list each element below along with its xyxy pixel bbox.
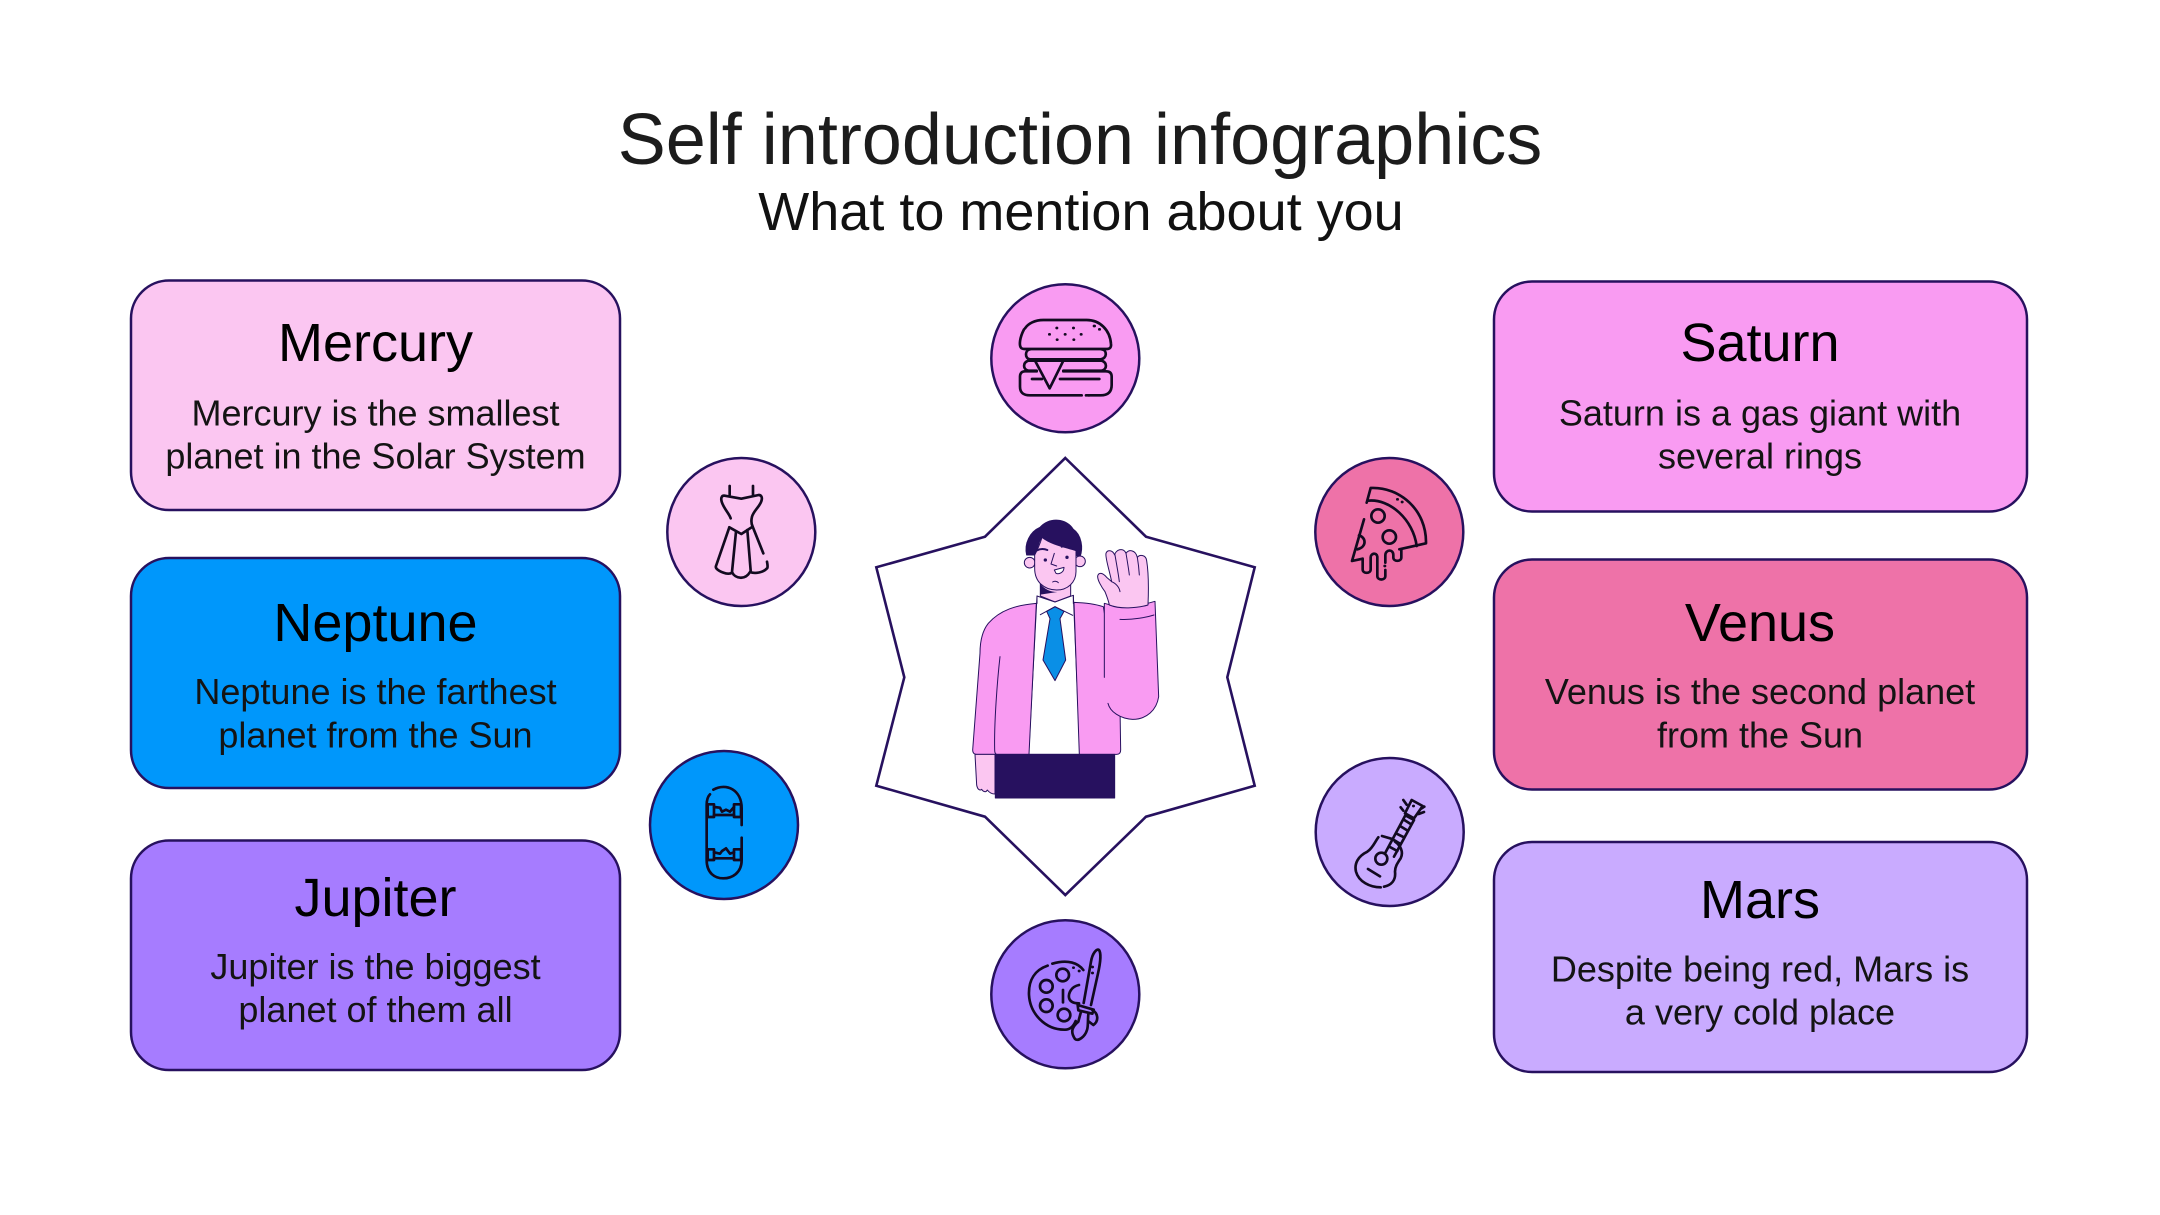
subtitle: What to mention about you <box>758 182 1404 242</box>
icon: pizza <box>1352 488 1426 579</box>
panel: Venus: Venus <box>1685 593 1835 653</box>
ears <box>1024 557 1035 568</box>
icon: dress <box>716 486 768 578</box>
eyes, nose, mouth <box>1037 546 1071 550</box>
raised arm <box>1104 601 1159 719</box>
panel: Venus: from the Sun <box>1657 714 1863 756</box>
panel: Jupiter: Jupiter is the biggest <box>210 946 541 987</box>
panel: Jupiter: Jupiter <box>294 868 457 928</box>
trousers <box>995 754 1115 798</box>
panel: Jupiter: planet of them all <box>238 989 513 1030</box>
shirt <box>1029 595 1080 755</box>
panel: Mars: Despite being red, Mars is <box>1551 948 1969 990</box>
panel: Mercury: Mercury <box>278 313 473 373</box>
circle: palette <box>991 920 1139 1068</box>
panel: Neptune: planet from the Sun <box>218 714 533 756</box>
panel: Saturn: several rings <box>1658 436 1862 476</box>
panel: Mars: Mars <box>1700 870 1820 930</box>
panel: Saturn: Saturn <box>1680 313 1840 373</box>
panel: Neptune: Neptune <box>273 593 478 653</box>
circle: burger <box>991 284 1139 432</box>
icon: guitar <box>1356 800 1424 887</box>
panel: Venus: Venus is the second planet <box>1545 671 1975 712</box>
circle: dress <box>667 458 815 606</box>
jacket <box>973 602 1121 754</box>
panel: Mercury: planet in the Solar System <box>165 436 586 476</box>
panel: Venus <box>1494 560 2027 790</box>
icon: burger <box>1020 320 1112 395</box>
icon: palette <box>1029 950 1100 1040</box>
circle: guitar <box>1316 758 1464 906</box>
panel: Mercury <box>131 280 620 510</box>
collar <box>1037 595 1073 615</box>
illustration: waving man <box>973 520 1159 798</box>
panel: Saturn: Saturn is a gas giant with <box>1559 392 1961 434</box>
panel: Mercury: Mercury is the smallest <box>191 392 560 434</box>
panel: Neptune: Neptune is the farthest <box>194 671 557 712</box>
title: Self introduction infographics <box>618 100 1542 180</box>
panel: Mars <box>1494 842 2027 1072</box>
panel: Mars: a very cold place <box>1625 992 1895 1032</box>
icon: skateboard <box>707 787 742 878</box>
circle: skateboard <box>650 751 798 899</box>
hair <box>1026 520 1082 557</box>
raised hand <box>1098 550 1148 608</box>
face <box>1035 537 1076 590</box>
panel: Jupiter <box>131 840 620 1070</box>
star frame <box>876 458 1255 895</box>
tie <box>1043 607 1066 681</box>
panel: Neptune <box>131 558 620 788</box>
left hand <box>975 754 995 794</box>
neck <box>1040 580 1071 602</box>
panel: Saturn <box>1494 282 2027 512</box>
circle: pizza <box>1315 458 1463 606</box>
